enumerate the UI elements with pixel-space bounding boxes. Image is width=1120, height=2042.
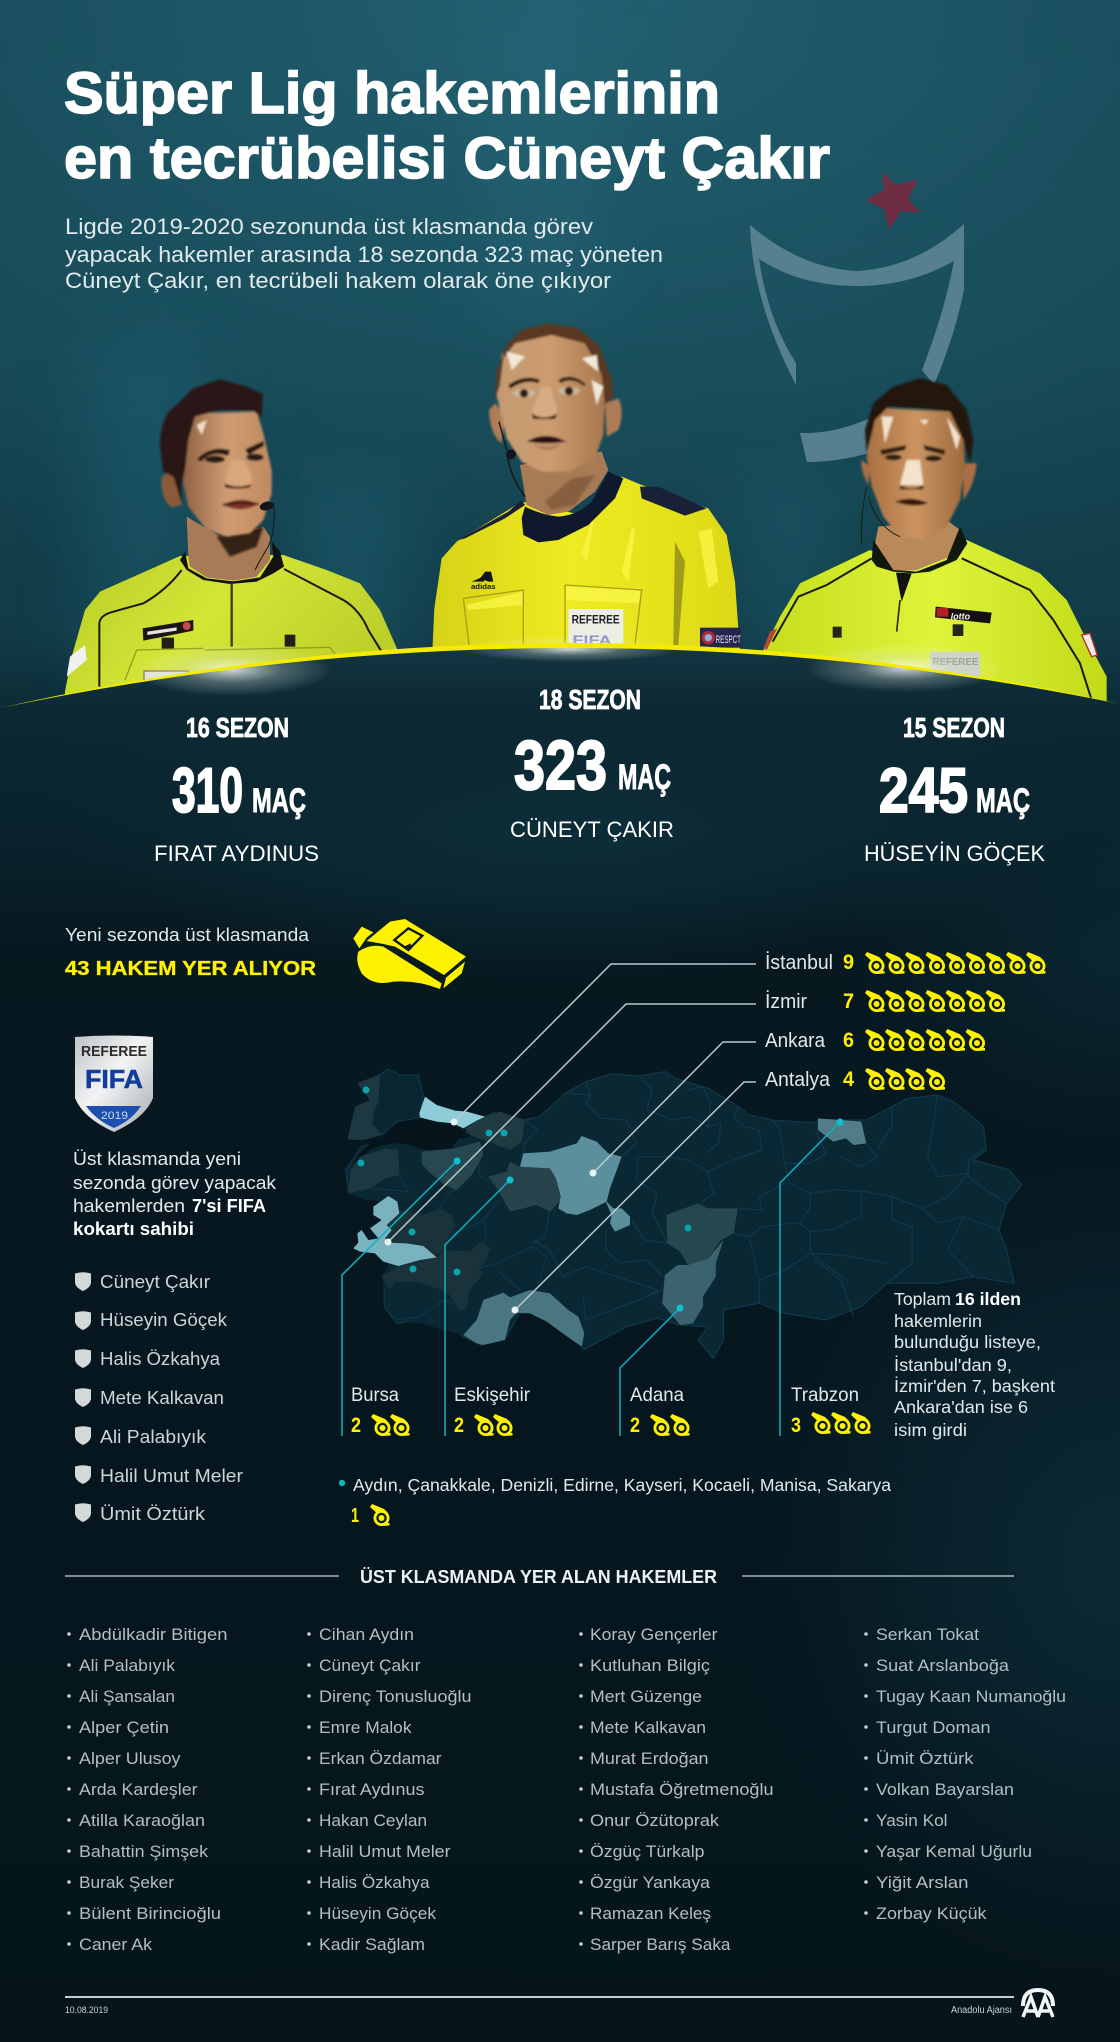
province: Kayseri (666, 1203, 738, 1265)
leader line: Ankara (593, 1042, 756, 1173)
city row: Izmir (765, 990, 1005, 1013)
city row: Antalya: 4 (843, 1068, 854, 1091)
FIFA referees list: Ali Palabıyık (100, 1427, 207, 1447)
map of Turkey (346, 1069, 1022, 1358)
referee names: column 1: Arda Kardeşler (79, 1780, 198, 1799)
referee names: column 3: Mustafa Öğretmenoğlu (590, 1780, 774, 1799)
referee stat: Fırat Aydınus: FIRAT AYDINUS (154, 841, 319, 866)
leader line: Izmir (388, 1004, 756, 1242)
intro text (65, 214, 663, 293)
referee names: column 3: Mete Kalkavan (590, 1718, 706, 1737)
referee names: column 4: Turgut Doman (876, 1718, 990, 1737)
referee stat: Cüneyt Çakır: MAÇ (618, 758, 671, 797)
referee names: column 2: Kadir Sağlam (319, 1935, 425, 1954)
referee names: column 1: Caner Ak (79, 1935, 153, 1954)
referee names: column 4 (864, 1625, 1066, 1923)
leader line: Bursa (342, 1161, 457, 1436)
side note: 16 ilden (955, 1289, 1021, 1309)
illustration: Hüseyin Göçek (763, 378, 1107, 707)
referee count headline (65, 925, 317, 980)
leader line: Antalya (515, 1082, 756, 1310)
referee stat: Fırat Aydınus: 16 SEZON (186, 712, 289, 743)
intro text: yapacak hakemler arasında 18 sezonda 323 maç yöneten (65, 242, 663, 267)
referee names: column 1: Burak Şeker (79, 1873, 174, 1892)
city row: Istanbul: 9 (843, 951, 854, 974)
city row: Izmir: İzmir (765, 990, 807, 1013)
province: Istanbul (419, 1097, 485, 1128)
referee names: column 3 (579, 1625, 774, 1954)
FIFA text: sezonda görev yapacak (73, 1173, 277, 1193)
city row: Antalya (765, 1068, 945, 1091)
Marmara sea (352, 1119, 477, 1165)
referee names: column 4: Volkan Bayarslan (876, 1780, 1014, 1799)
referee names: column 4: Yaşar Kemal Uğurlu (876, 1842, 1032, 1861)
referee stat: Hüseyin Göçek: MAÇ (976, 782, 1030, 820)
city: Eskişehir: Eskişehir (454, 1385, 531, 1406)
side note: Toplam (894, 1289, 951, 1309)
referee names: column 1: Bülent Birincioğlu (79, 1904, 221, 1923)
referee names: column 4: Yiğit Arslan (876, 1873, 968, 1892)
section heading: ÜST KLASMANDA YER ALAN HAKEMLER (360, 1567, 717, 1587)
FIFA badge (75, 1036, 153, 1132)
referee names: column 3: Onur Özütoprak (590, 1811, 720, 1830)
referee names: column 2: Hüseyin Göçek (319, 1904, 436, 1923)
illustration: Fırat Aydınus (65, 379, 398, 707)
province: Kocaeli and Sakarya (465, 1112, 525, 1150)
referee names: column 1: Atilla Karaoğlan (79, 1811, 205, 1830)
referee stat: Hüseyin Göçek: 15 SEZON (903, 712, 1005, 743)
city row: Ankara (765, 1029, 985, 1052)
leader line: Adana (620, 1308, 680, 1436)
leader line: Trabzon (780, 1122, 840, 1436)
FIFA referees list: Ümit Öztürk (100, 1504, 206, 1524)
FIFA text (73, 1149, 277, 1239)
FIFA text: kokartı sahibi (73, 1219, 194, 1239)
FIFA text: 7'si FIFA (192, 1196, 266, 1216)
side note: İstanbul'dan 9, (894, 1355, 1012, 1375)
city row: Ankara: 6 (843, 1029, 854, 1052)
illustration: Cüneyt Çakır (432, 323, 741, 652)
illustration: Cüneyt Çakır: RESPCT (716, 634, 741, 646)
referee names: column 1: Bahattin Şimşek (79, 1842, 209, 1861)
city: Eskişehir (454, 1385, 531, 1437)
city: Bursa: Bursa (351, 1385, 399, 1406)
footer: Anadolu Ajansı (951, 2005, 1012, 2016)
illustration: Hüseyin Göçek: lotto (951, 611, 971, 621)
map markers: single-referee provinces (358, 1086, 692, 1276)
title: Süper Lig hakemlerinin (64, 61, 720, 126)
referee names: column 3: Özgüç Türkalp (590, 1842, 704, 1861)
referee names: column 1 (67, 1625, 228, 1954)
province: Tekirdağ and Kırklareli (372, 1069, 423, 1135)
province: Trabzon (818, 1118, 866, 1145)
referee names: column 1: Alper Çetin (79, 1718, 169, 1737)
province: Adana (662, 1240, 723, 1325)
city row: Antalya: Antalya (765, 1069, 831, 1091)
city: Trabzon (791, 1385, 870, 1437)
other provinces: Aydın, Çanakkale, Denizli, Edirne, Kayseri, Kocaeli, Manisa, Sakarya (353, 1475, 891, 1495)
city: Trabzon: Trabzon (791, 1385, 859, 1406)
city row: Istanbul (765, 951, 1046, 974)
logo: Anadolu Ajansı (1023, 1990, 1053, 2017)
FIFA badge: FIFA (85, 1064, 143, 1094)
leader line: Eskişehir (445, 1180, 510, 1436)
FIFA referees list: Halis Özkahya (100, 1349, 221, 1369)
side note: İzmir'den 7, başkent (894, 1376, 1055, 1396)
province: Bursa (422, 1142, 483, 1190)
city: Adana: Adana (630, 1385, 684, 1406)
city: Adana (630, 1385, 690, 1437)
FIFA text: Üst klasmanda yeni (73, 1149, 241, 1169)
city: Bursa (351, 1385, 410, 1437)
referee stat: Fırat Aydınus: MAÇ (252, 782, 306, 820)
FIFA referees list: Cüneyt Çakır (100, 1272, 210, 1292)
referee names: column 4: Ümit Öztürk (876, 1749, 974, 1768)
referee count headline: Yeni sezonda üst klasmanda (65, 925, 310, 945)
referee names: column 2: Halis Özkahya (319, 1873, 430, 1892)
city row: Ankara: Ankara (765, 1030, 826, 1052)
FIFA referees list: Hüseyin Göçek (100, 1310, 228, 1330)
referee names: column 3: Koray Gençerler (590, 1625, 718, 1644)
referee names: column 3: Özgür Yankaya (590, 1873, 711, 1892)
referee stat: Cüneyt Çakır: CÜNEYT ÇAKIR (510, 817, 674, 842)
city row: Istanbul: İstanbul (765, 951, 833, 974)
western Anatolia base (348, 1143, 533, 1335)
province: Manisa (385, 1208, 455, 1257)
map dots: labelled provinces (384, 1118, 844, 1314)
referee stat: Cüneyt Çakır: 18 SEZON (539, 684, 641, 715)
province: Eskişehir (488, 1162, 561, 1212)
referee names: column 3: Murat Erdoğan (590, 1749, 708, 1768)
referee names: column 4: Serkan Tokat (876, 1625, 979, 1644)
FIFA referees list: Halil Umut Meler (100, 1466, 243, 1486)
icon: large whistle (353, 919, 466, 989)
province: Aydın and Denizli (382, 1242, 490, 1312)
referee count headline: 43 HAKEM YER ALIYOR (65, 958, 317, 980)
stage arc (0, 636, 1120, 960)
intro text: Cüneyt Çakır, en tecrübeli hakem olarak öne çıkıyor (65, 268, 611, 293)
league logo (750, 172, 964, 462)
illustration: Cüneyt Çakır: FIFA (572, 632, 612, 647)
leader line: Istanbul (454, 964, 756, 1122)
referee stat: Cüneyt Çakır (510, 684, 674, 842)
referee names: column 3: Sarper Barış Saka (590, 1935, 731, 1954)
city row: Izmir: 7 (843, 990, 854, 1013)
side note: bulunduğu listeye, (894, 1332, 1041, 1352)
side note: isim girdi (894, 1420, 967, 1440)
intro text: Ligde 2019-2020 sezonunda üst klasmanda görev (65, 214, 593, 239)
referee names: column 2: Halil Umut Meler (319, 1842, 451, 1861)
referee names: column 1: Ali Şansalan (79, 1687, 175, 1706)
referee names: column 4: Yasin Kol (876, 1811, 948, 1830)
referee names: column 2: Cihan Aydın (319, 1625, 414, 1644)
side note: hakemlerin (894, 1311, 982, 1331)
city: Eskişehir: 2 (454, 1414, 464, 1437)
city: Adana: 2 (630, 1414, 640, 1437)
referee names: column 2: Hakan Ceylan (319, 1811, 427, 1830)
FIFA badge: REFEREE (81, 1043, 147, 1060)
province: Ankara (520, 1136, 630, 1232)
referee names: column 2: Fırat Aydınus (319, 1780, 424, 1799)
title: en tecrübelisi Cüneyt Çakır (64, 126, 830, 191)
province: Antalya (463, 1290, 584, 1347)
referee names: column 2 (307, 1625, 472, 1954)
referee names: column 2: Emre Malok (319, 1718, 412, 1737)
referee stat: Fırat Aydınus: 310 (172, 756, 243, 826)
province: Izmir (353, 1196, 437, 1266)
other provinces: 1 (351, 1505, 359, 1527)
referee names: column 3: Ramazan Keleş (590, 1904, 711, 1923)
referee names: column 4: Suat Arslanboğa (876, 1656, 1010, 1675)
referee names: column 4: Tugay Kaan Numanoğlu (876, 1687, 1066, 1706)
referee names: column 2: Direnç Tonusluoğlu (319, 1687, 472, 1706)
referee names: column 3: Kutluhan Bilgiç (590, 1656, 711, 1675)
referee names: column 1: Alper Ulusoy (79, 1749, 181, 1768)
FIFA text: hakemlerden (73, 1196, 185, 1216)
FIFA referees list: Mete Kalkavan (100, 1388, 224, 1408)
illustration: Hüseyin Göçek: REFEREE (933, 657, 979, 668)
city: Trabzon: 3 (791, 1414, 801, 1437)
referee stat: Cüneyt Çakır: 323 (514, 726, 607, 804)
FIFA badge: 2019 (101, 1110, 128, 1122)
western province borders (370, 1160, 547, 1320)
referee stat: Hüseyin Göçek: 245 (879, 756, 968, 826)
province: Çanakkale (348, 1148, 399, 1193)
referee names: column 3: Mert Güzenge (590, 1687, 702, 1706)
star (866, 172, 921, 230)
footer: 10.08.2019 (65, 2005, 108, 2016)
referee stat: Fırat Aydınus (154, 712, 319, 866)
referee names: column 1: Abdülkadir Bitigen (79, 1625, 228, 1644)
title (64, 61, 830, 191)
side note: Ankara'dan ise 6 (894, 1397, 1028, 1417)
footer (65, 1990, 1053, 2017)
illustration: Cüneyt Çakır: adidas (471, 582, 496, 591)
city: Bursa: 2 (351, 1414, 361, 1437)
referee names: column 1: Ali Palabıyık (79, 1656, 176, 1675)
referee names: column 2: Cüneyt Çakır (319, 1656, 421, 1675)
other provinces (339, 1475, 891, 1527)
province: Edirne (347, 1074, 382, 1140)
referee names: column 4: Zorbay Küçük (876, 1904, 987, 1923)
referee stat: Hüseyin Göçek (864, 712, 1045, 866)
side note (894, 1289, 1055, 1440)
illustration: Cüneyt Çakır: REFEREE (572, 614, 620, 627)
referee stat: Hüseyin Göçek: HÜSEYİN GÖÇEK (864, 841, 1045, 866)
FIFA referees list (75, 1272, 243, 1524)
referee names: column 2: Erkan Özdamar (319, 1749, 442, 1768)
